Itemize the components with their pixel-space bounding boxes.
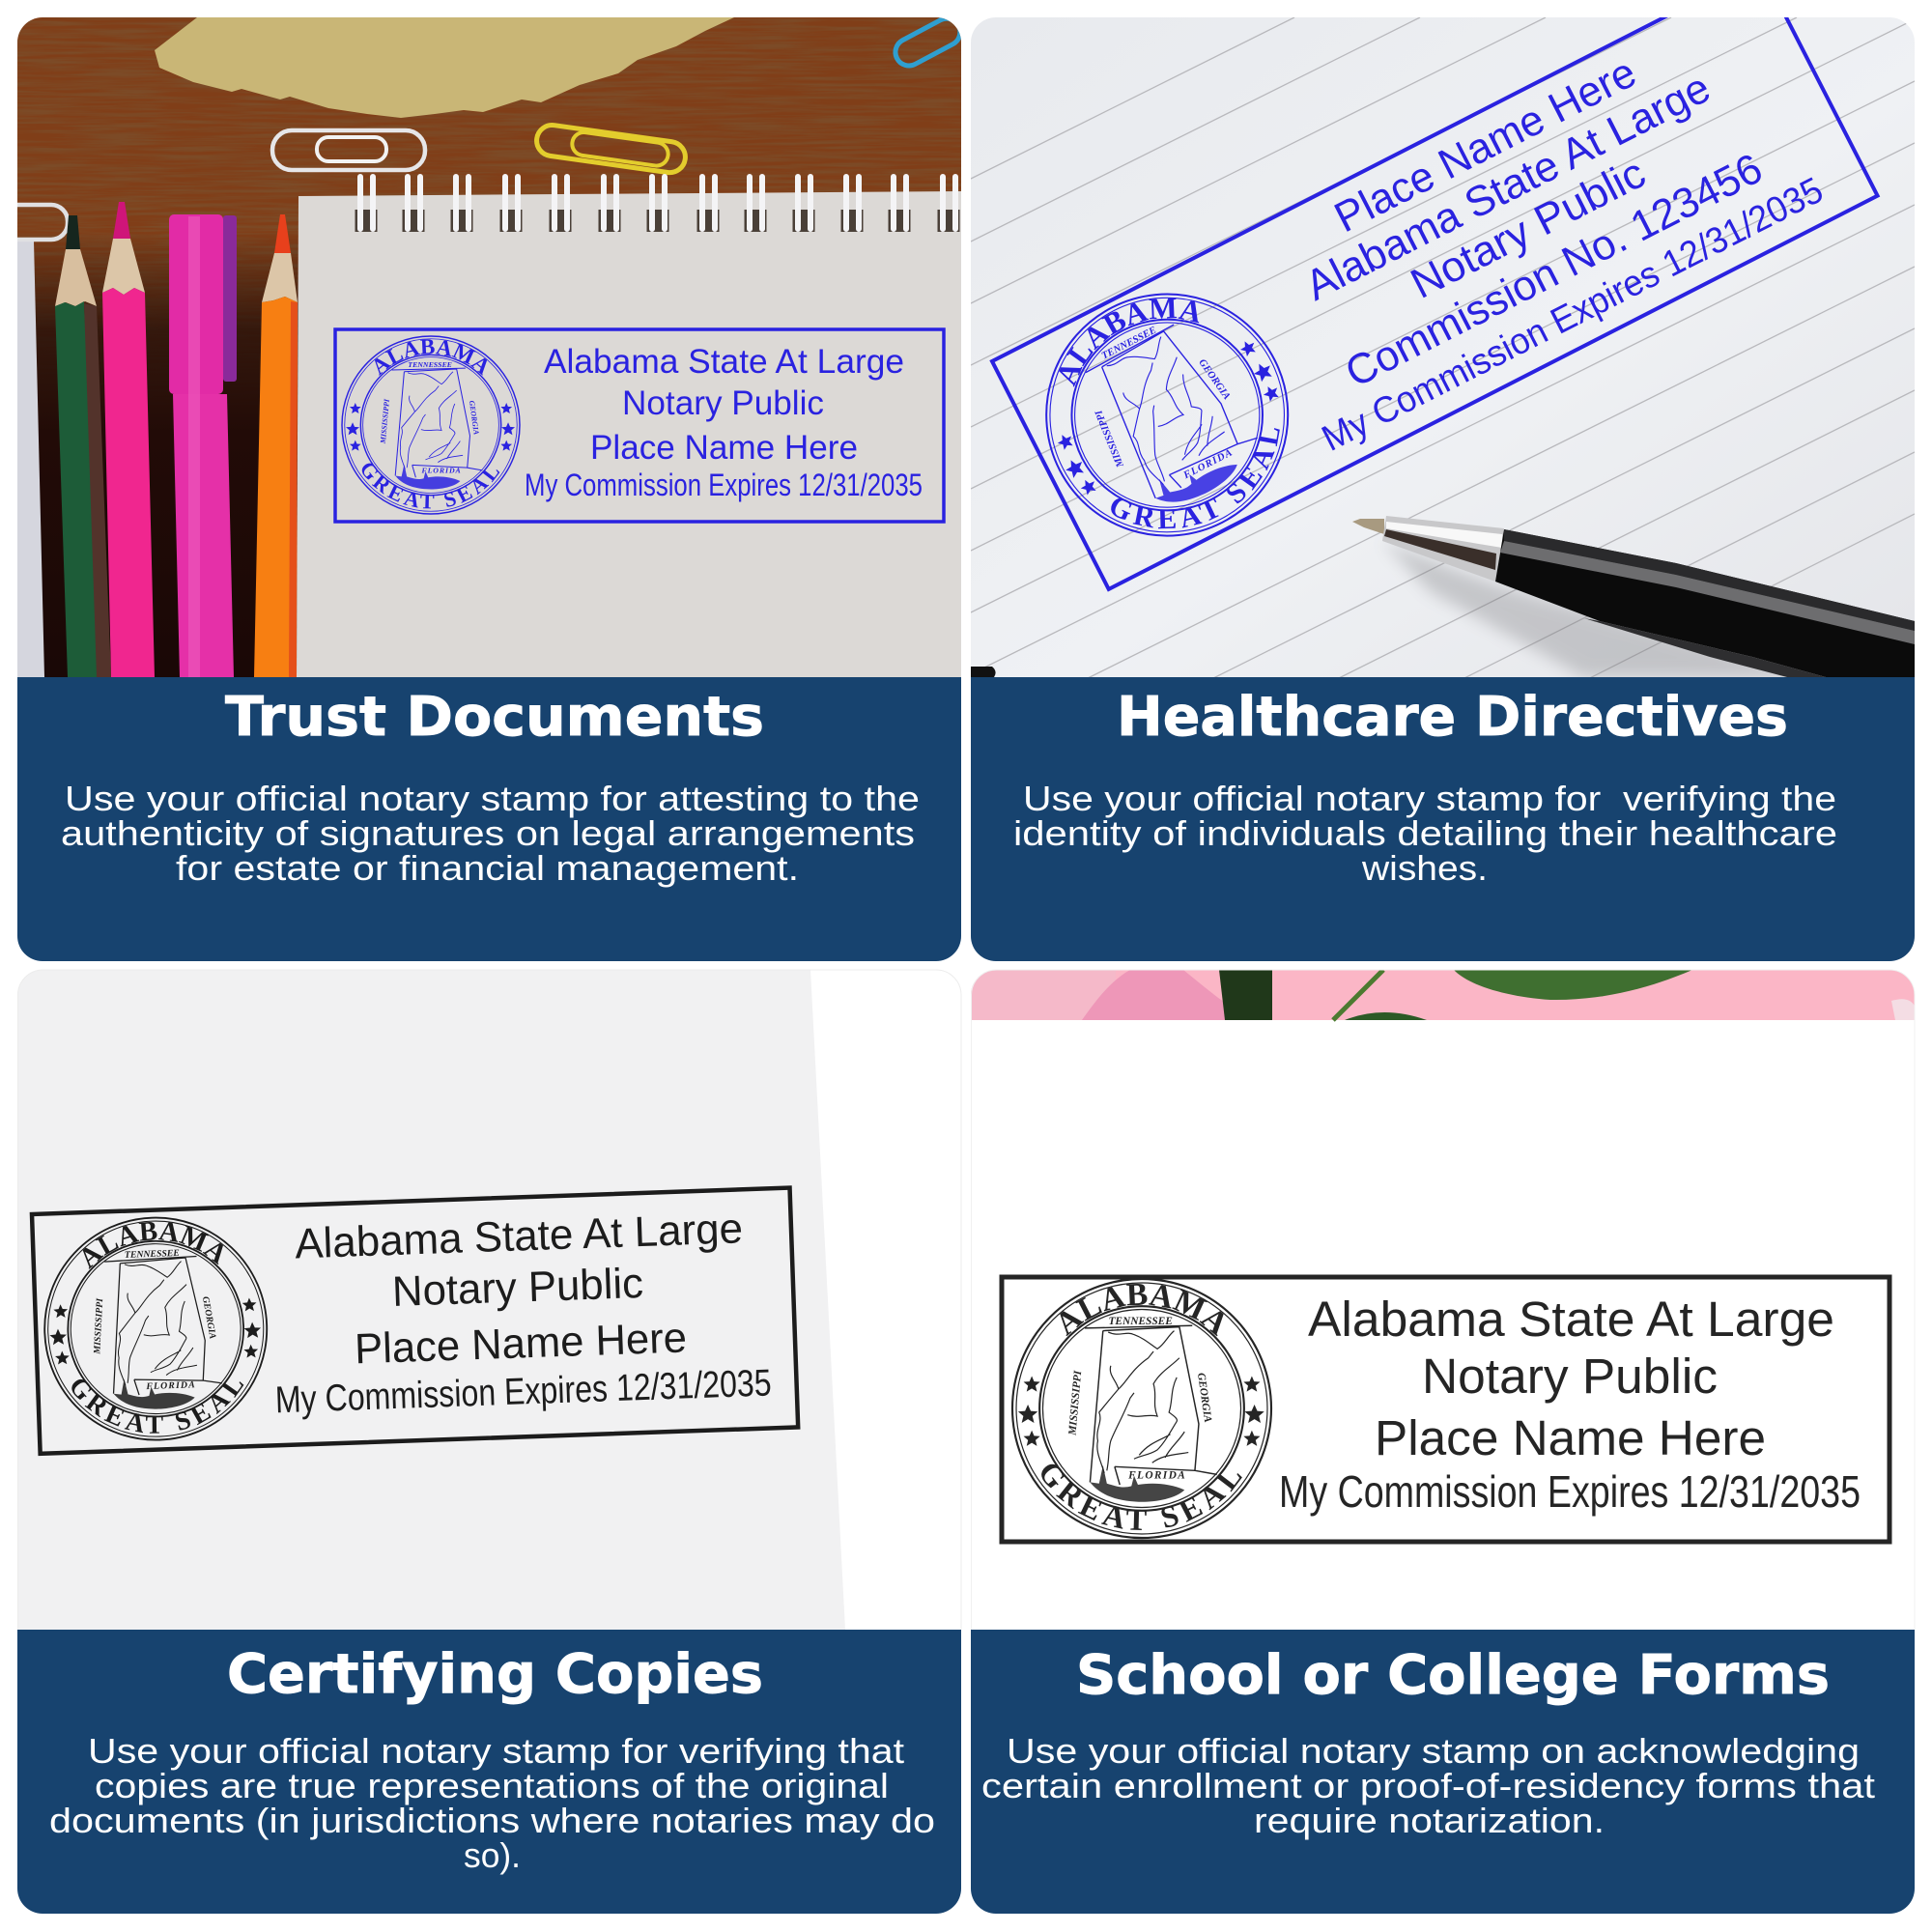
seal: Alabama great seal: GREAT SEAL xyxy=(1041,1464,1242,1530)
caption band xyxy=(971,677,1915,961)
seal: Alabama great seal: GEORGIA xyxy=(468,400,481,436)
seal: Alabama great seal: GEORGIA xyxy=(200,1295,218,1340)
seal: Alabama great seal: MISSISSIPPI xyxy=(1094,408,1126,469)
heading: Healthcare Directives xyxy=(1117,686,1788,749)
description: Use your official notary stamp for attesting to the xyxy=(65,779,920,818)
stamp text lines xyxy=(269,1205,772,1421)
seal: Alabama great seal: TENNESSEE xyxy=(408,360,452,369)
seal: Alabama great seal: MISSISSIPPI xyxy=(1066,1370,1084,1436)
stamp text lines: Place Name Here xyxy=(1375,1410,1766,1465)
photo: white sheet with pink flower strip xyxy=(971,970,1915,1022)
seal: Alabama great seal: FLORIDA xyxy=(1181,447,1236,482)
stamp text lines: Notary Public xyxy=(1422,1349,1718,1404)
seal: Alabama great seal: TENNESSEE xyxy=(1108,1316,1173,1327)
stamp text lines: Notary Public xyxy=(1404,149,1653,308)
seal: Alabama great seal: ALABAMA xyxy=(83,1222,223,1269)
seal: Alabama great seal: GEORGIA xyxy=(1195,1372,1213,1424)
seal: Alabama great seal: GREAT SEAL xyxy=(71,1379,243,1434)
panel: Trust Documents xyxy=(17,17,961,961)
description: so). xyxy=(464,1835,521,1875)
black stamp impression xyxy=(29,1185,800,1457)
stamp text lines: Place Name Here xyxy=(590,429,858,467)
stamp text lines: My Commission Expires 12/31/2035 xyxy=(274,1362,772,1421)
description: authenticity of signatures on legal arrangements xyxy=(61,813,915,853)
seal: Alabama great seal: ALABAMA xyxy=(1059,298,1200,386)
stamp text lines: Alabama State At Large xyxy=(294,1205,744,1268)
description xyxy=(49,1731,935,1875)
description: Use your official notary stamp for verifying that xyxy=(88,1731,904,1771)
seal: Alabama great seal: ALABAMA xyxy=(1060,1284,1224,1337)
caption band xyxy=(971,1630,1915,1914)
stamp text lines: My Commission Expires 12/31/2035 xyxy=(1316,170,1830,460)
seal: Alabama great seal: FLORIDA xyxy=(145,1379,196,1392)
seal: Alabama great seal: MISSISSIPPI xyxy=(92,1297,105,1355)
photo: notebook and pencils on wood desk xyxy=(0,14,965,677)
stamp text lines: Notary Public xyxy=(391,1260,644,1316)
caption band xyxy=(17,1630,961,1914)
description: identity of individuals detailing their healthcare xyxy=(1013,813,1837,853)
description xyxy=(981,1731,1875,1840)
stamp text lines: My Commission Expires 12/31/2035 xyxy=(525,468,923,502)
seal: Alabama great seal xyxy=(1010,1279,1273,1540)
description xyxy=(61,779,920,888)
seal: Alabama great seal: MISSISSIPPI xyxy=(379,398,391,444)
stamp text lines xyxy=(525,343,923,502)
caption band xyxy=(17,677,961,961)
black stamp impression xyxy=(999,1275,1891,1544)
seal: Alabama great seal: FLORIDA xyxy=(421,467,462,475)
seal: Alabama great seal: GEORGIA xyxy=(1196,357,1232,402)
description: Use your official notary stamp on acknowledging xyxy=(1007,1731,1860,1771)
seal: Alabama great seal: ALABAMA xyxy=(375,339,487,376)
photo: grey paper sheet xyxy=(18,970,845,1630)
stamp text lines: Alabama State At Large xyxy=(1298,64,1718,310)
seal: Alabama great seal: FLORIDA xyxy=(1127,1469,1186,1481)
heading: School or College Forms xyxy=(1076,1644,1830,1707)
seal: Alabama great seal: GREAT SEAL xyxy=(361,464,500,508)
stamp text lines: Place Name Here xyxy=(354,1314,688,1373)
description: for estate or financial management. xyxy=(176,848,799,888)
stamp text lines xyxy=(1279,1292,1861,1517)
stamp text lines: Notary Public xyxy=(622,384,824,422)
stamp text lines: Commission No. 123456 xyxy=(1338,145,1770,397)
blue stamp impression xyxy=(989,17,1880,592)
blue stamp impression xyxy=(333,327,946,524)
heading: Trust Documents xyxy=(225,686,764,749)
seal: Alabama great seal xyxy=(341,335,521,515)
panel: School or College Forms xyxy=(971,970,1915,1914)
description: certain enrollment or proof-of-residency forms that xyxy=(981,1766,1875,1805)
description: wishes. xyxy=(1361,848,1488,888)
panel: Certifying Copies xyxy=(17,970,961,1914)
stamp text lines: Alabama State At Large xyxy=(544,343,904,381)
heading: Certifying Copies xyxy=(227,1643,763,1706)
stamp text lines: Alabama State At Large xyxy=(1308,1292,1834,1347)
stamp text lines: Place Name Here xyxy=(1327,48,1643,242)
description: require notarization. xyxy=(1254,1801,1605,1840)
panel: Healthcare Directives xyxy=(971,17,1915,961)
seal: Alabama great seal: TENNESSEE xyxy=(125,1248,181,1261)
photo: lined paper with pen xyxy=(971,17,1915,691)
description: copies are true representations of the original xyxy=(95,1766,889,1805)
seal: Alabama great seal: GREAT SEAL xyxy=(1111,428,1280,529)
seal: Alabama great seal xyxy=(43,1217,269,1441)
description: Use your official notary stamp for verifying the xyxy=(1023,779,1836,818)
seal: Alabama great seal: TENNESSEE xyxy=(1100,326,1158,362)
seal: Alabama great seal xyxy=(1045,294,1289,537)
description xyxy=(1016,785,1835,881)
description: documents (in jurisdictions where notaries may do xyxy=(49,1801,935,1840)
